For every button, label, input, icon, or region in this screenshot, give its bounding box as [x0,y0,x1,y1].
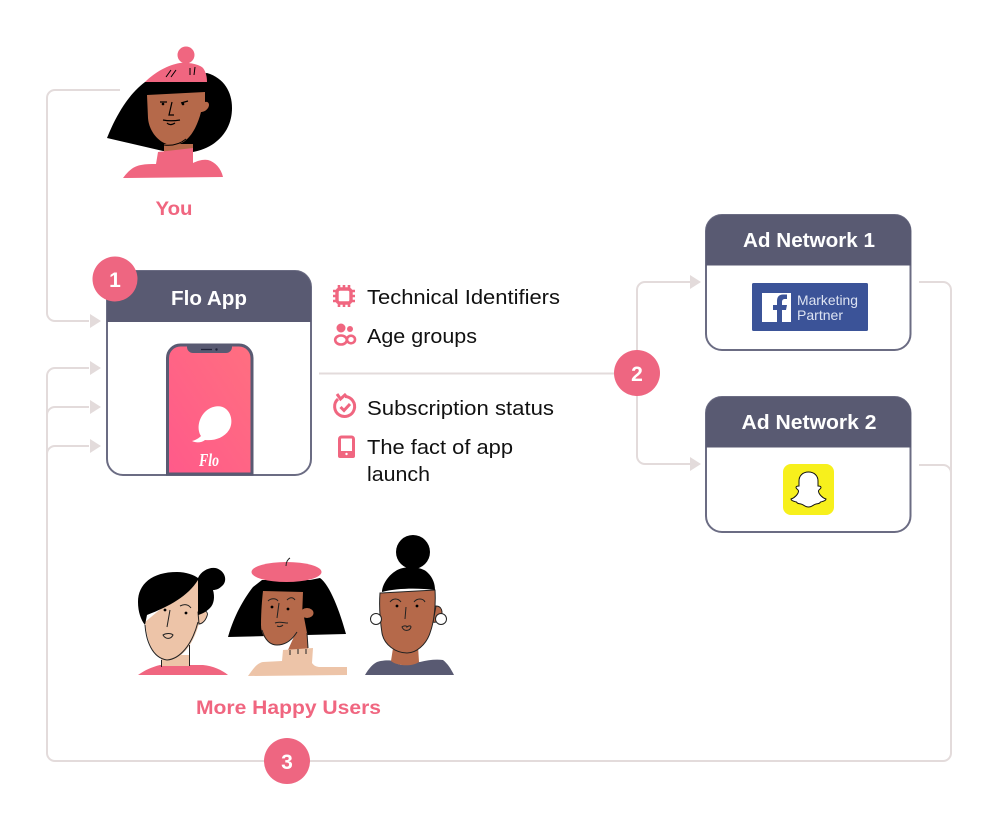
badge 3 [264,738,310,784]
connector: you to Flo App [47,90,120,321]
panel header [706,397,911,448]
text: Age groups: Age groups [367,326,477,348]
person: middle [228,558,347,676]
arrows: into ad networks [690,275,701,471]
panel title: Ad Network 1 [743,230,875,252]
icon: tablet [338,437,355,458]
icon: people [335,324,355,344]
list: data shared above line [333,285,560,348]
text: Technical Identifiers: Technical Identifiers [367,287,560,309]
panel: Ad Network 2 [706,397,911,532]
connector: Flo App to ad networks [319,282,690,464]
panel: Ad Network 1 [706,215,911,350]
connector: feedback loop from ad networks to Flo App [47,282,951,761]
badge 2: 2 [631,363,643,386]
panel title: Ad Network 2 [742,412,876,434]
wordmark: Flo [198,450,219,470]
badge 1: 1 [109,269,121,292]
label: More Happy Users: More Happy Users [196,698,381,719]
label: You: You [156,199,192,220]
arrow: into Flo App top [90,314,101,328]
text: The fact of app launch: launch [367,464,430,486]
panel: Flo App [107,271,311,475]
logo: Facebook Marketing Partner: Marketing [797,292,858,308]
person: left [138,568,228,675]
panel body [706,215,910,350]
panel header [107,271,311,322]
text: Subscription status: Subscription status [367,398,554,420]
logo: Snapchat [783,464,834,515]
panel title: Flo App [171,288,247,310]
list: data shared below line [335,394,554,486]
badge 3: 3 [281,751,293,774]
panel body [706,397,910,532]
panel body [107,271,311,475]
badge 2 [614,350,660,396]
badge 1 [92,256,138,302]
person: right [365,535,454,675]
logo: Facebook Marketing Partner: Partner [797,307,843,323]
icon: feather [192,406,231,442]
icon: chip [333,285,355,307]
phone [168,345,252,474]
text: The fact of app launch: The fact of app [367,437,513,459]
icon: subscription refresh [335,394,355,416]
illustration: more happy users [138,535,454,676]
arrows: loop into Flo App [90,361,101,453]
logo: Facebook Marketing Partner [752,283,868,331]
panel header [706,215,911,266]
illustration: you [107,46,232,178]
